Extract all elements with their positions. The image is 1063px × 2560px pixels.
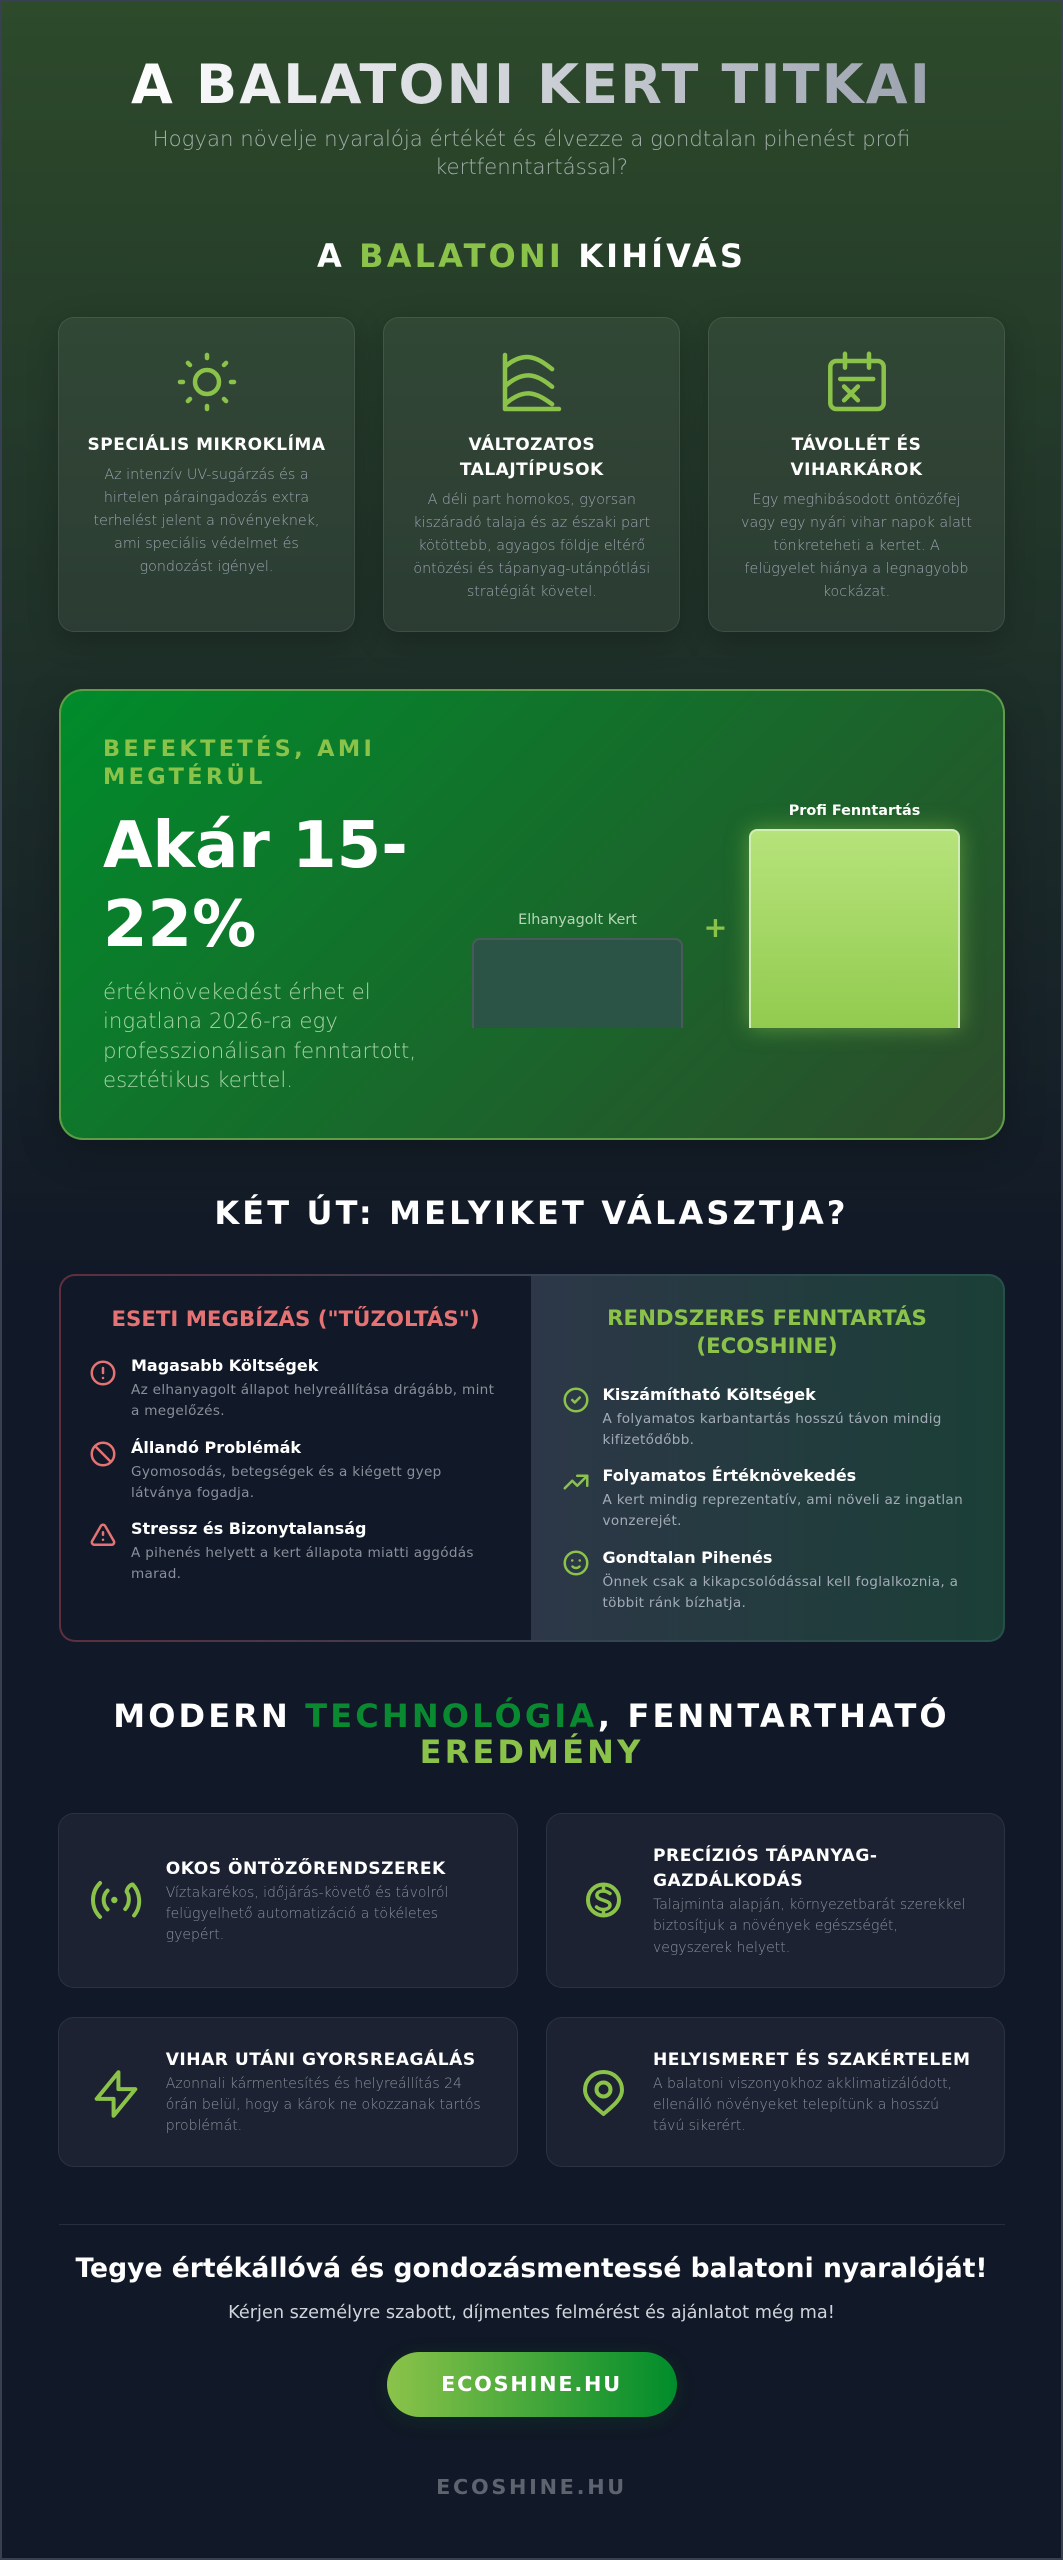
item: értéknövekedés: A kert mindig reprezentatív, ami növeli az ingatlan bbox=[602, 1492, 963, 1508]
item: kiszámítható bbox=[602, 1384, 942, 1448]
icon: warning bbox=[90, 1524, 116, 1546]
text: talajtípusok: öntözési és tápanyag-utánpótlási bbox=[413, 560, 650, 576]
subtitle: Hogyan növelje nyaralója értékét és élvezze a gondtalan pihenést profi bbox=[153, 127, 910, 152]
panel: comparison bbox=[59, 1274, 1005, 1642]
heading: mikroklíma: SPECIÁLIS MIKROKLÍMA bbox=[88, 435, 325, 455]
icon: alert bbox=[90, 1360, 116, 1386]
heading and text: GAZDÁLKODÁS bbox=[653, 1871, 803, 1891]
item: állandó problémák bbox=[131, 1438, 442, 1501]
heading and text: problémát. bbox=[166, 2118, 242, 2134]
heading and text bbox=[653, 1845, 965, 1956]
panel: eseti megbízás bbox=[59, 1274, 531, 1642]
item: stressz: A pihenés helyett a kert állapota miatti aggódás bbox=[131, 1545, 474, 1561]
icon: trending up bbox=[564, 1474, 588, 1490]
text: mikroklíma: ami speciális védelmet és bbox=[114, 536, 299, 552]
item: magasabb költségek: Az elhanyagolt állapot helyreállítása drágább, mint bbox=[131, 1382, 494, 1398]
text: távollét bbox=[741, 492, 972, 600]
item: kiszámítható: A folyamatos karbantartás hosszú távon mindig bbox=[602, 1410, 942, 1426]
item: stressz: Stressz és Bizonytalanság bbox=[131, 1519, 366, 1538]
heading: rendszeres: RENDSZERES FENNTARTÁS bbox=[607, 1306, 927, 1330]
heading and text: Talajminta alapján, környezetbarát szerekkel bbox=[653, 1897, 965, 1913]
text: értéknövekedés: esztétikus kerttel. bbox=[103, 1068, 293, 1093]
icon: pin bbox=[583, 2070, 624, 2116]
cta heading: Tegye értékállóvá és gondozásmentessé balatoni nyaralóját! bbox=[75, 2253, 988, 2284]
text: távollét: tönkreteheti a kertet. A bbox=[773, 538, 940, 554]
heading: talajtípusok bbox=[460, 434, 604, 480]
heading and text: HELYISMERET ÉS SZAKÉRTELEM bbox=[653, 2050, 971, 2070]
panel: okos öntözés bbox=[58, 1813, 518, 1988]
panel: tápanyag bbox=[546, 1813, 1005, 1988]
item: értéknövekedés bbox=[602, 1466, 963, 1529]
heading and text: távú sikerért. bbox=[653, 2118, 746, 2134]
item: gondtalan: többit ránk bízhatja. bbox=[602, 1595, 746, 1611]
icon: calendar bbox=[828, 352, 886, 412]
heading and text bbox=[166, 2049, 481, 2134]
plus sign: + bbox=[703, 910, 728, 944]
icon: bolt bbox=[94, 2070, 138, 2118]
icon: signal bbox=[91, 1880, 142, 1920]
heading and text: felügyelhető automatizáció a tökéletes bbox=[166, 1906, 438, 1922]
big number: 22% bbox=[103, 888, 256, 962]
text: mikroklíma: gondozást igényel. bbox=[140, 558, 273, 574]
heading and text: PRECÍZIÓS TÁPANYAG- bbox=[653, 1846, 877, 1866]
heading: két út: KÉT ÚT: MELYIKET VÁLASZTJA? bbox=[214, 1194, 849, 1232]
text: mikroklíma: hirtelen páraingadozás extra bbox=[104, 490, 309, 506]
icon: soil layers bbox=[502, 352, 562, 412]
item: magasabb költségek: a megelőzés. bbox=[131, 1403, 225, 1419]
heading and text: ellenálló növényeket telepítünk a hosszú bbox=[653, 2097, 939, 2113]
subtitle bbox=[153, 127, 910, 180]
text: értéknövekedés: értéknövekedést érhet el bbox=[103, 980, 371, 1005]
heading: talajtípusok: VÁLTOZATOS bbox=[468, 435, 595, 455]
text: talajtípusok: stratégiát követel. bbox=[467, 584, 597, 600]
text: talajtípusok bbox=[413, 492, 650, 600]
heading: modern technológia: MODERN TECHNOLÓGIA, FENNTARTHATÓ bbox=[113, 1697, 950, 1735]
text: távollét: kockázat. bbox=[823, 584, 890, 600]
text: értéknövekedés: professzionálisan fenntartott, bbox=[103, 1039, 416, 1064]
item: állandó problémák: Gyomosodás, betegségek és a kiégett gyep bbox=[131, 1464, 442, 1480]
text: távollét: Egy meghibásodott öntözőfej bbox=[752, 492, 961, 508]
panel: talajtípusok card bbox=[383, 317, 680, 632]
panel: helyismeret bbox=[546, 2017, 1005, 2167]
heading: rendszeres: (ECOSHINE) bbox=[696, 1334, 838, 1358]
heading: távollét: VIHARKÁROK bbox=[790, 460, 922, 480]
heading and text: OKOS ÖNTÖZŐRENDSZEREK bbox=[166, 1858, 446, 1878]
text: távollét: vagy egy nyári vihar napok alatt bbox=[741, 514, 972, 530]
text: értéknövekedés: ingatlana 2026-ra egy bbox=[103, 1009, 338, 1034]
panel: rendszeres fenntartás bbox=[531, 1274, 1005, 1642]
text: mikroklíma: Az intenzív UV-sugárzás és a bbox=[104, 466, 309, 482]
heading: távollét: TÁVOLLÉT ÉS bbox=[792, 435, 921, 455]
panel: távollét card bbox=[708, 317, 1005, 632]
big number: Akár 15- bbox=[103, 809, 408, 883]
panel: mikroklíma card bbox=[58, 317, 355, 632]
item: értéknövekedés: vonzerejét. bbox=[602, 1513, 682, 1529]
heading and text: órán belül, hogy a károk ne okozzanak tartós bbox=[166, 2097, 481, 2113]
icon: check bbox=[564, 1388, 588, 1412]
item: magasabb költségek: Magasabb Költségek bbox=[131, 1356, 318, 1375]
cta text: Kérjen személyre szabott, díjmentes felmérést és ajánlatot még ma! bbox=[228, 2303, 835, 2323]
item: értéknövekedés: Folyamatos Értéknövekedés bbox=[602, 1466, 856, 1485]
title: A BALATONI KERT TITKAI bbox=[131, 53, 932, 116]
label: befektetés: BEFEKTETÉS, AMI bbox=[103, 736, 375, 762]
item: gondtalan: Gondtalan Pihenés bbox=[602, 1548, 772, 1566]
text: értéknövekedés bbox=[103, 980, 416, 1093]
heading and text: Víztakarékos, időjárás-követő és távolról bbox=[166, 1884, 448, 1900]
item: állandó problémák: Állandó Problémák bbox=[131, 1438, 301, 1456]
subtitle: kertfenntartással? bbox=[435, 155, 628, 180]
item: gondtalan: Önnek csak a kikapcsolódással kell foglalkoznia, a bbox=[602, 1574, 958, 1590]
heading and text: A balatoni viszonyokhoz akklimatizálódott, bbox=[653, 2076, 952, 2092]
heading and text: VIHAR UTÁNI GYORSREAGÁLÁS bbox=[166, 2050, 476, 2070]
bar label: professional: Profi Fenntartás bbox=[789, 802, 920, 818]
text: talajtípusok: kötöttebb, agyagos földje eltérő bbox=[418, 538, 645, 554]
heading: modern technológia bbox=[113, 1697, 950, 1771]
heading: eseti: ESETI MEGBÍZÁS ("TŰZOLTÁS") bbox=[111, 1306, 480, 1332]
item: magasabb költségek bbox=[131, 1356, 494, 1419]
chart: value comparison bbox=[472, 802, 971, 1039]
item: stressz: marad. bbox=[131, 1566, 181, 1582]
label: befektetés: MEGTÉRÜL bbox=[103, 764, 266, 790]
heading and text: biztosítjuk a növények egészségét, bbox=[653, 1918, 898, 1934]
heading: modern technológia: EREDMÉNY bbox=[420, 1733, 643, 1771]
heading and text bbox=[166, 1858, 448, 1943]
heading and text: gyepért. bbox=[166, 1927, 224, 1943]
item: kiszámítható: Kiszámítható Költségek bbox=[602, 1384, 816, 1404]
panel: investment hero bbox=[59, 689, 1005, 1140]
item: stressz bbox=[131, 1519, 474, 1582]
cta button: ECOSHINE.HU bbox=[441, 2372, 622, 2396]
icon: sun bbox=[178, 352, 236, 412]
heading: rendszeres bbox=[607, 1305, 927, 1358]
panel: vihar bbox=[58, 2017, 518, 2167]
heading and text bbox=[653, 2049, 971, 2134]
heading: távollét bbox=[790, 434, 922, 480]
footer brand: ECOSHINE.HU bbox=[436, 2475, 627, 2499]
icon: dollar bbox=[586, 1882, 621, 1918]
item: kiszámítható: kifizetődőbb. bbox=[602, 1432, 694, 1448]
heading: talajtípusok: TALAJTÍPUSOK bbox=[460, 460, 604, 480]
item: gondtalan bbox=[602, 1548, 958, 1611]
text: talajtípusok: kiszáradó talaja és az északi part bbox=[413, 514, 650, 530]
text: talajtípusok: A déli part homokos, gyorsan bbox=[428, 492, 636, 508]
big number bbox=[103, 809, 408, 962]
label: befektetés bbox=[103, 735, 375, 790]
icon: ban bbox=[90, 1442, 116, 1466]
text: mikroklíma bbox=[94, 466, 319, 574]
footer divider bbox=[59, 2224, 1005, 2225]
cta button bbox=[386, 2352, 676, 2417]
heading and text: Azonnali kármentesítés és helyreállítás 24 bbox=[166, 2076, 462, 2092]
item: állandó problémák: látványa fogadja. bbox=[131, 1485, 254, 1501]
text: mikroklíma: terhelést jelent a növényeknek, bbox=[94, 512, 319, 528]
text: távollét: felügyelet hiánya a legnagyobb bbox=[745, 560, 968, 576]
bar: professional bbox=[749, 829, 960, 1028]
icon: smile bbox=[564, 1550, 588, 1576]
bar: neglected bbox=[472, 938, 683, 1028]
heading and text: vegyszerek helyett. bbox=[653, 1940, 790, 1956]
heading: a balatoni kihívás: A BALATONI KIHÍVÁS bbox=[317, 237, 746, 275]
bar label: neglected: Elhanyagolt Kert bbox=[518, 912, 637, 928]
